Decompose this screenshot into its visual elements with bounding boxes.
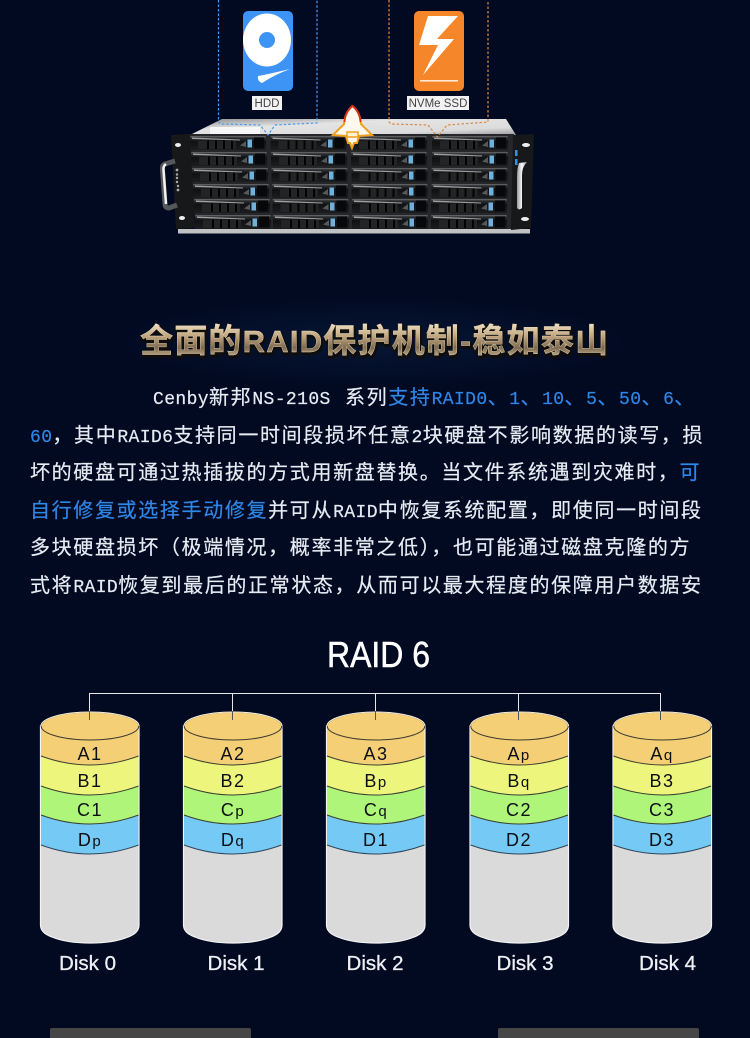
disk 2: A3 [363,744,389,764]
disk 1 [184,711,282,975]
chart: RAID 6 disk array [40,711,712,975]
arrow: HDD dashed guide [218,0,317,135]
disk 4: B3 [649,771,675,791]
label: HDD: HDD [255,98,279,110]
arrow: SSD dashed guide [389,0,488,137]
title: 全面的RAID保护机制-稳如泰山 [141,324,609,361]
text line 2: 60，其中RAID6支持同一时间段损坏任意2块硬盘不影响数据的读写，损 [30,425,704,448]
label: NVMe SSD: NVMe SSD [409,98,467,110]
title glow [115,297,635,387]
left button stub [50,1028,251,1038]
disk 1: B2 [220,771,246,791]
disk 4: D3 [649,830,675,850]
disk 0: Disk 0 [59,952,116,975]
disk 3: Ap [507,744,531,764]
disk 3: Bq [507,771,531,791]
disk 0: Dp [78,830,102,850]
server chassis top [190,119,516,135]
disk 4 [613,711,712,975]
body text [30,386,704,598]
disk 0: C1 [77,800,103,820]
disk 0: A1 [77,744,103,764]
chart title: RAID 6: RAID 6 [327,634,430,675]
disk 3: D2 [506,830,532,850]
disk 4: C3 [649,800,675,820]
disk 4: Aq [650,744,674,764]
disk 2: D1 [363,830,389,850]
disk 3: C2 [506,800,532,820]
left rack ear [162,134,195,229]
icon: NVMe SSD drive [414,11,464,91]
connector lines [90,694,660,720]
disk 4: Disk 4 [639,952,696,975]
text line 6: 式将RAID恢复到最后的正常状态，从而可以最大程度的保障用户数据安 [30,575,703,598]
icon: rocket [333,106,372,148]
right rack ear [511,134,534,230]
disk 2 [326,711,425,975]
disk 2: Cq [364,800,388,820]
disk 3 [470,711,568,975]
disk 1: Cp [221,800,245,820]
disk 1: Disk 1 [208,952,264,975]
disk 0: B1 [77,771,103,791]
text line 3: 坏的硬盘可通过热插拔的方式用新盘替换。当文件系统遇到灾难时，可 [30,462,701,484]
icon: HDD drive [243,11,293,91]
right button stub [498,1028,699,1038]
disk 1: Dq [221,830,245,850]
disk 2: Disk 2 [347,952,403,975]
storage server [162,119,534,234]
disk 0 [40,711,139,975]
disk 3: Disk 3 [497,952,553,975]
text line 5: 多块硬盘损坏（极端情况，概率非常之低），也可能通过磁盘克隆的方 [30,537,691,559]
title: 全面的RAID保护机制-稳如泰山 [140,322,608,359]
disk 2: Bp [364,771,388,791]
server front plate [188,134,514,230]
disk 1: A2 [220,744,246,764]
text line 1: Cenby新邦NS-210S 系列支持RAID0、1、10、5、50、6、 [153,387,696,410]
drive bays [190,136,508,229]
text line 4: 自行修复或选择手动修复并可从RAID中恢复系统配置，即使同一时间段 [30,500,703,523]
